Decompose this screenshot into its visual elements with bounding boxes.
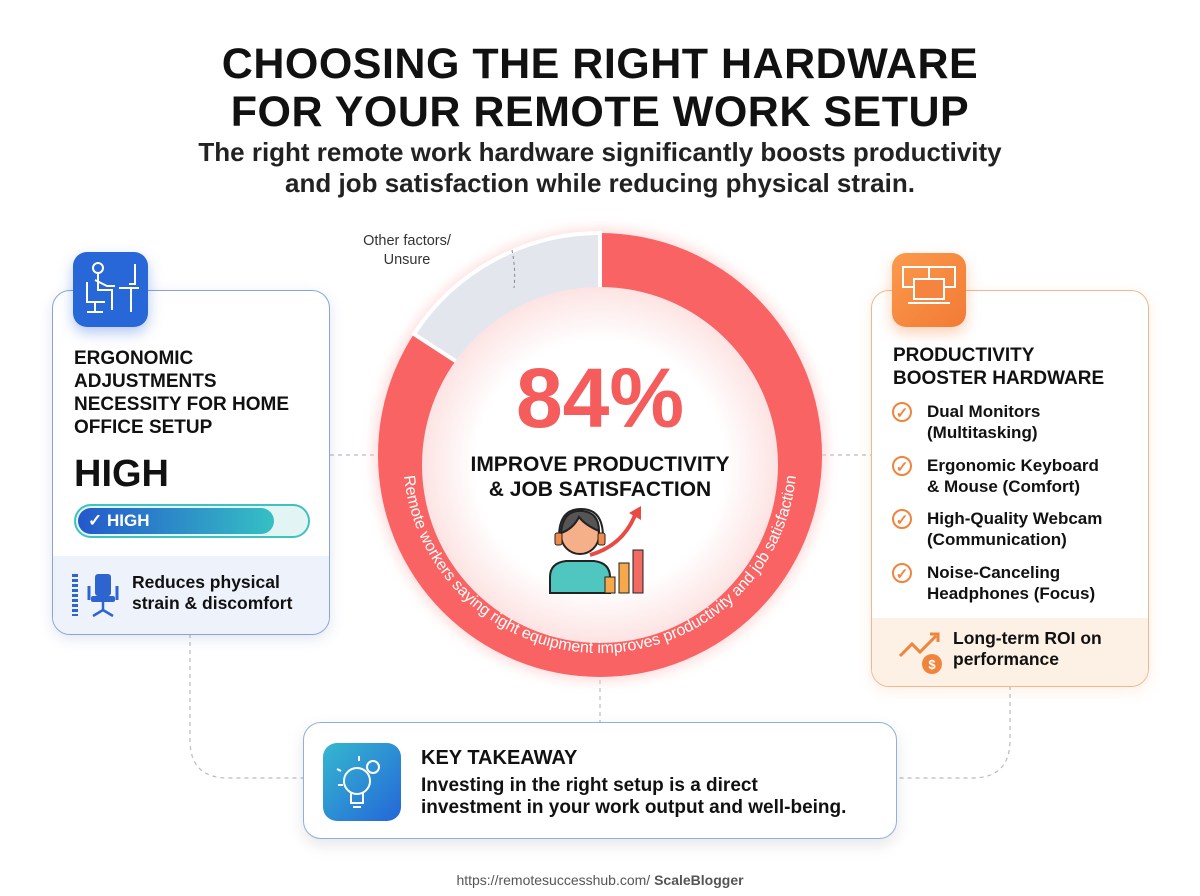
heading	[893, 345, 1104, 389]
checklist: (Communication)	[927, 530, 1067, 549]
heading: OFFICE SETUP	[74, 417, 212, 438]
heading	[74, 348, 289, 438]
icon: monitors	[892, 253, 966, 327]
label: other factors: Unsure	[384, 252, 430, 268]
heading: ADJUSTMENTS	[74, 371, 217, 392]
panel: key takeaway: investment in your work output and well-being.	[421, 797, 846, 818]
title: FOR YOUR REMOTE WORK SETUP	[231, 88, 969, 136]
footer: ROI: $	[928, 657, 936, 672]
heading: BOOSTER HARDWARE	[893, 368, 1104, 389]
footer: reduces strain: Reduces physical	[132, 572, 280, 592]
footer: ROI: Long-term ROI on	[953, 628, 1102, 648]
footer: ROI	[872, 618, 1148, 686]
subtitle: The right remote work hardware significantly boosts productivity	[198, 137, 1002, 167]
donut chart	[370, 224, 831, 686]
stat label: & JOB SATISFACTION	[489, 478, 711, 501]
checklist: & Mouse (Comfort)	[927, 477, 1080, 496]
icon: worker with growth chart	[549, 506, 644, 594]
footer: ROI: performance	[953, 649, 1059, 669]
footer: reduces strain: strain & discomfort	[132, 593, 292, 613]
stat label	[470, 453, 730, 501]
title: CHOOSING THE RIGHT HARDWARE	[222, 40, 978, 88]
label: other factors: Other factors/	[363, 233, 451, 249]
checklist: Headphones (Focus)	[927, 584, 1095, 603]
icon: ergonomic desk	[73, 252, 148, 327]
progress bar: ✓ HIGH	[88, 511, 149, 530]
subtitle: and job satisfaction while reducing physical strain.	[285, 168, 915, 198]
checklist: ✓	[896, 405, 908, 422]
progress bar	[74, 504, 310, 538]
checklist: ✓	[896, 512, 908, 529]
curved ring text: Remote workers saying right equipment improves productivity and job satisfaction	[404, 476, 796, 656]
panel: productivity booster	[871, 290, 1149, 687]
panel: key takeaway: Investing in the right setup is a direct	[421, 775, 758, 796]
footer source: https://remotesuccesshub.com/ ScaleBlogger	[456, 872, 744, 888]
checklist: High-Quality Webcam	[927, 509, 1102, 528]
checklist: Ergonomic Keyboard	[927, 456, 1099, 475]
checklist: ✓	[896, 459, 908, 476]
icon: lightbulb gear	[323, 743, 401, 821]
title	[222, 40, 978, 136]
checklist	[892, 402, 1102, 603]
big stat 84%: 84%	[516, 351, 684, 445]
checklist: (Multitasking)	[927, 423, 1038, 442]
panel: ergonomic	[52, 290, 330, 635]
heading: ERGONOMIC	[74, 348, 193, 369]
checklist: Noise-Canceling	[927, 563, 1060, 582]
panel: key takeaway	[303, 722, 897, 839]
label: other factors	[363, 233, 451, 268]
takeaway text: KEY TAKEAWAY	[421, 747, 577, 769]
stat label: IMPROVE PRODUCTIVITY	[470, 453, 730, 476]
footer: reduces strain	[53, 556, 329, 634]
checklist: ✓	[896, 566, 908, 583]
value HIGH: HIGH	[74, 453, 169, 495]
heading: NECESSITY FOR HOME	[74, 394, 289, 415]
heading: PRODUCTIVITY	[893, 345, 1034, 366]
checklist: Dual Monitors	[927, 402, 1040, 421]
subtitle	[198, 137, 1002, 198]
